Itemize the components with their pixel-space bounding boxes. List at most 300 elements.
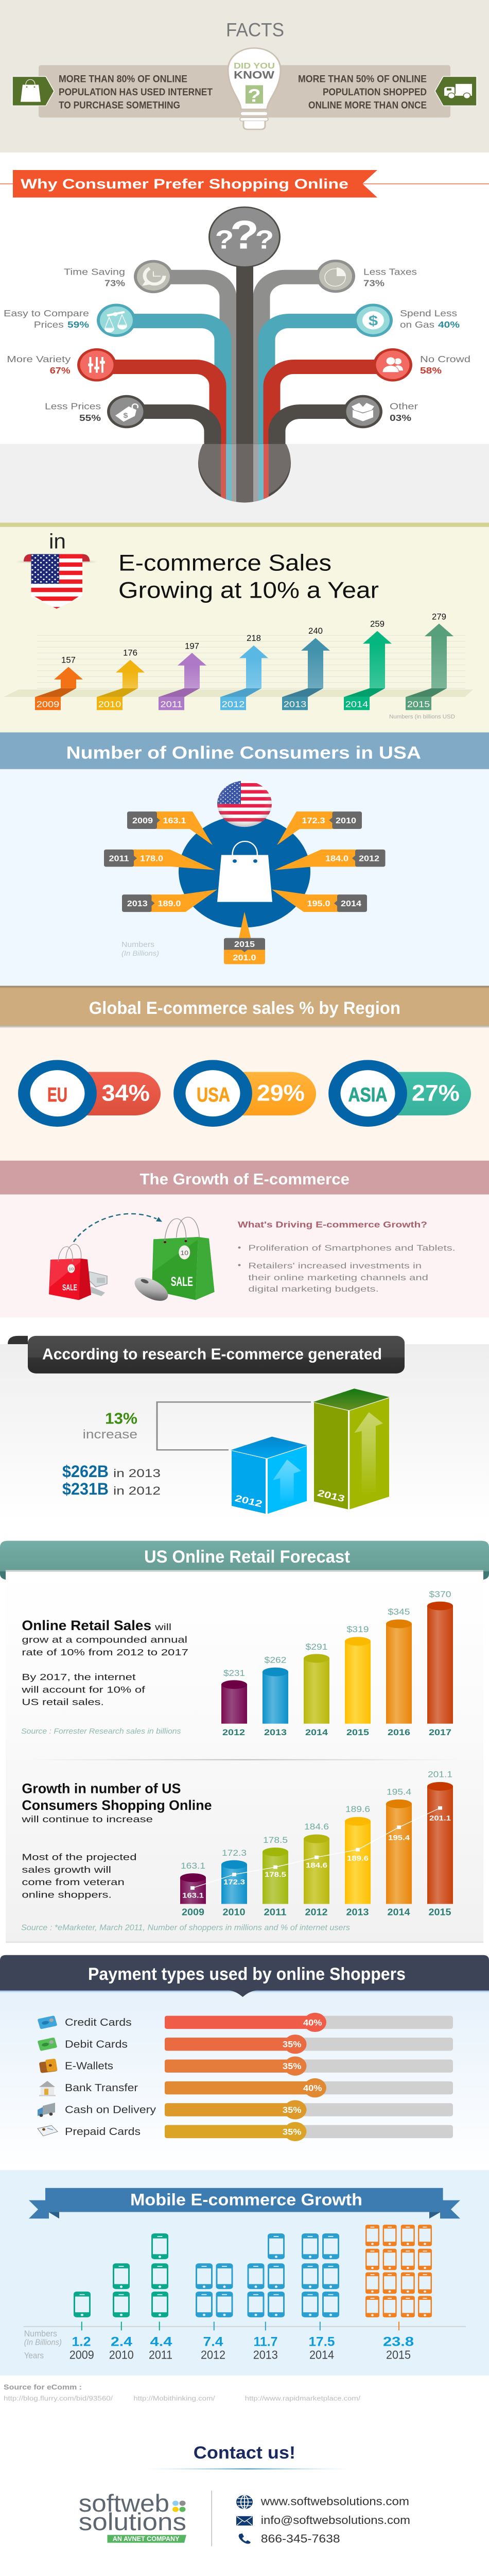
icon: delivery truck tag <box>435 76 477 106</box>
value labels above bars: 172.3 <box>222 1848 247 1858</box>
text: 80 percent fact: TO PURCHASE SOMETHING <box>59 99 180 111</box>
blue circle <box>179 816 310 927</box>
logo: softweb solutions: AN AVNET COMPANY <box>113 2535 180 2543</box>
icon: debit card <box>38 2037 57 2051</box>
values in billions <box>72 2334 414 2349</box>
panel: US online retail forecast <box>0 1541 489 1943</box>
arrow 2014: 2014 <box>345 699 368 709</box>
label: easy to compare <box>4 309 89 330</box>
label: spend less on gas: 40% <box>438 320 460 330</box>
value labels: $345 <box>388 1606 410 1617</box>
text: revenue figures: in 2012 <box>113 1485 161 1497</box>
value labels above bars: 195.4 <box>387 1787 411 1797</box>
text: 50 percent fact: POPULATION SHOPPED <box>323 87 427 97</box>
title: e-commerce sales growing: E-commerce Sales <box>118 550 331 576</box>
bar chart: online retail sales <box>221 1589 453 1737</box>
callout 2011 <box>104 850 215 870</box>
callout 2012: 184.0 <box>325 854 348 863</box>
value labels inside bars: 189.6 <box>347 1855 369 1862</box>
callout 2010 <box>277 811 362 845</box>
text: online retail sales <box>21 1618 188 1707</box>
bar chart: consumers shopping online <box>180 1769 453 1918</box>
question marks circle <box>209 207 280 267</box>
panel: did you know facts <box>0 0 489 152</box>
row: bank transfer: Bank Transfer <box>65 2082 138 2094</box>
text: 50 percent fact: ONLINE MORE THAN ONCE <box>308 99 427 111</box>
values in billions: 17.5 <box>309 2334 335 2349</box>
text: online retail sales: By 2017, the internet <box>22 1672 136 1683</box>
region: USA: USA <box>197 1083 230 1106</box>
callout 2010: 172.3 <box>302 816 325 825</box>
bar 2009 <box>180 1873 206 1904</box>
year labels: 2010 <box>222 1907 245 1918</box>
label: less prices: Less Prices <box>45 401 101 412</box>
callout 2012 <box>274 850 385 870</box>
phones: 2009 <box>74 2292 91 2317</box>
text: online retail sales: US retail sales. <box>22 1697 104 1707</box>
arrow 2011 <box>159 641 206 710</box>
values in billions: 23.8 <box>383 2334 414 2349</box>
value labels above bars <box>181 1769 452 1870</box>
text: revenue figures: $231B <box>62 1480 109 1498</box>
year labels: 2016 <box>388 1727 410 1737</box>
phones: 2012 <box>196 2263 233 2317</box>
value labels: $370 <box>429 1589 451 1599</box>
values in billions: 7.4 <box>203 2334 223 2349</box>
icon: 2012 cube: 2012 <box>234 1493 264 1510</box>
icon: computer mouse <box>130 1273 173 1306</box>
bar 2015 <box>345 1637 371 1724</box>
callout 2015: 201.0 <box>233 953 256 962</box>
value labels inside bars: 163.1 <box>182 1892 204 1900</box>
value labels: $262 <box>264 1655 286 1665</box>
callout 2011: 2011 <box>109 854 129 863</box>
question marks circle: ? <box>255 225 274 255</box>
heading band <box>0 986 489 1028</box>
value labels <box>223 1589 451 1677</box>
icon: red sale bag <box>49 1244 91 1300</box>
label: less taxes <box>363 267 417 289</box>
heading band <box>0 733 489 769</box>
axis captions <box>24 2329 62 2360</box>
icon: mail <box>236 2516 253 2526</box>
arrow 2015 <box>406 612 453 710</box>
text: in: in <box>49 530 66 553</box>
icon: shopping bag tag <box>12 76 54 106</box>
phones: 2015 <box>365 2225 432 2317</box>
bar 2010 <box>221 1860 247 1904</box>
year labels <box>222 1727 451 1737</box>
row: prepaid cards: 35% <box>283 2127 302 2137</box>
row: e-wallets <box>39 2057 453 2076</box>
row: prepaid cards: Prepaid Cards <box>65 2126 141 2138</box>
year labels: 2013 <box>264 1727 287 1737</box>
callout 2009: 163.1 <box>163 816 186 825</box>
heading band: Number of Online Consumers in USA <box>66 742 421 762</box>
row: credit cards: 40% <box>303 2018 322 2027</box>
icon: scales <box>97 303 136 337</box>
region: Asia: 27% <box>412 1080 460 1106</box>
row: debit cards: 35% <box>283 2039 302 2049</box>
panel: payment types <box>0 1955 489 2170</box>
contact section <box>79 2443 410 2546</box>
callout 2015 <box>224 912 265 964</box>
icon: globe <box>237 2496 252 2509</box>
value labels: $319 <box>347 1624 369 1634</box>
icon: red sale bag: SALE <box>62 1282 77 1292</box>
icon: open box <box>343 395 382 428</box>
text: 80 percent fact: POPULATION HAS USED INTERNET <box>59 87 213 97</box>
icon: 2012 cube <box>231 1437 307 1514</box>
callout 2014 <box>272 889 367 912</box>
icon: USA flag banner <box>15 554 98 609</box>
callout 2013: 2013 <box>127 899 148 908</box>
sources: http://www.rapidmarketplace.com/ <box>245 2395 360 2402</box>
year labels: 2012 <box>201 2348 225 2362</box>
timeline axis <box>24 2321 466 2330</box>
label: other: 03% <box>390 413 411 423</box>
callout 2014: 195.0 <box>307 899 330 908</box>
label: more variety: 67% <box>50 366 71 376</box>
values in billions: 2.4 <box>111 2334 132 2349</box>
icon: van <box>38 2103 55 2117</box>
text: what's driving growth: Proliferation of Smartphones and Tablets. <box>248 1243 456 1252</box>
icon: green sale bag: 10 <box>181 1249 188 1257</box>
year labels: 2009 <box>182 1907 204 1918</box>
value labels inside bars: 201.1 <box>429 1815 451 1822</box>
value labels inside bars: 184.6 <box>306 1862 327 1870</box>
text: 80 percent fact <box>59 73 213 111</box>
callout 2014: 2014 <box>341 899 362 908</box>
icon: price tag <box>107 395 146 428</box>
heading ribbon <box>0 170 489 197</box>
row: cash on delivery: 35% <box>283 2105 302 2115</box>
row: e-wallets: E-Wallets <box>65 2060 113 2072</box>
row: bank transfer <box>39 2078 453 2097</box>
label: no crowd: 58% <box>420 366 442 376</box>
icon: 2013 cube: 2013 <box>316 1488 346 1504</box>
text: growth in US consumers <box>21 1781 212 1900</box>
text: what's driving growth: their online marketing channels and <box>248 1273 428 1282</box>
text: growth in US consumers: Consumers Shopping Online <box>22 1798 212 1814</box>
value labels above bars: 184.6 <box>304 1821 329 1832</box>
icon: red sale bag: 10 <box>68 1266 74 1271</box>
callout 2013 <box>122 889 217 912</box>
icon: wallet <box>39 2059 58 2073</box>
arrow 2009: 2009 <box>37 699 59 709</box>
row: credit cards: Credit Cards <box>65 2016 132 2028</box>
bar 2015 <box>427 1782 453 1904</box>
panel: growth of e-commerce <box>0 1161 489 1317</box>
arrow 2011: 197 <box>185 641 199 651</box>
region: EU: EU <box>47 1083 67 1106</box>
text: what's driving growth: Retailers' increased investments in <box>248 1261 422 1270</box>
text: growth in US consumers: come from veteran <box>22 1877 125 1888</box>
arrow 2009 <box>35 655 83 710</box>
callout 2012: 2012 <box>359 854 379 863</box>
axis captions: (In Billions) <box>24 2337 62 2347</box>
label: less prices <box>45 401 101 423</box>
region: EU: 34% <box>102 1080 150 1106</box>
bar 2013 <box>263 1668 288 1724</box>
callout 2015: 2015 <box>234 940 255 949</box>
note: numbers in billions <box>121 941 159 958</box>
text: growth in US consumers: online shoppers. <box>22 1890 112 1900</box>
bar 2012 <box>304 1835 329 1904</box>
value labels: $231 <box>223 1668 245 1677</box>
heading: contact us: Contact us! <box>194 2443 295 2462</box>
arrow 2011: 2011 <box>161 699 182 709</box>
callout 2013: 189.0 <box>158 899 181 908</box>
value labels above bars: 201.1 <box>428 1769 452 1779</box>
text: 13 percent increase <box>83 1410 137 1442</box>
sources: Source for eComm : <box>4 2384 82 2391</box>
label: less taxes: 73% <box>363 278 385 289</box>
panel: e-commerce sales growth <box>0 522 489 733</box>
icon: cart <box>89 1272 107 1296</box>
heading band: The Growth of E-commerce <box>140 1171 350 1188</box>
year labels: 2017 <box>429 1727 451 1737</box>
label: no crowd <box>420 354 470 376</box>
value labels above bars: 163.1 <box>181 1860 205 1870</box>
note: numbers in billions: Numbers <box>121 941 154 949</box>
facts banner <box>39 65 450 117</box>
arrow 2010 <box>97 648 145 710</box>
note: numbers in billions: (In Billions) <box>121 950 159 958</box>
label: less taxes: Less Taxes <box>363 267 417 277</box>
arrow 2015: 279 <box>432 612 446 621</box>
callout 2009: 2009 <box>132 816 153 825</box>
icon: dollar: $ <box>369 313 378 329</box>
icon: people <box>373 348 412 381</box>
icon: ID card <box>38 2126 58 2136</box>
heading: FACTS: FACTS <box>226 19 284 41</box>
label: spend less on gas: on Gas <box>400 320 434 330</box>
row: debit cards <box>38 2035 453 2054</box>
text: online retail sales: Online Retail Sales <box>22 1618 151 1634</box>
arrow: dashed growth arrow <box>74 1214 162 1242</box>
heading ribbon: Mobile E-commerce Growth <box>130 2191 362 2209</box>
icon: price tag: $ <box>124 412 128 420</box>
chart: arrows by year <box>4 612 473 710</box>
year labels: 2010 <box>109 2348 134 2362</box>
heading band <box>0 1161 489 1194</box>
sources: http://Mobithinking.com/ <box>133 2395 215 2402</box>
text: 50 percent fact <box>298 73 427 111</box>
year labels: 2015 <box>428 1907 451 1918</box>
text: website: www.softwebsolutions.com <box>260 2495 409 2508</box>
region: Asia: ASIA <box>348 1083 388 1106</box>
icon: phone <box>239 2533 251 2544</box>
text: online retail sales: rate of 10% from 2012 to 2017 <box>22 1647 188 1657</box>
logo: softweb solutions <box>79 2490 186 2543</box>
bar 2011 <box>263 1848 288 1904</box>
heading ribbon <box>8 1336 405 1374</box>
label: no crowd: No Crowd <box>420 354 470 365</box>
heading band: Payment types used by online Shoppers <box>88 1964 406 1984</box>
icon: time saving <box>134 260 173 293</box>
axis captions: Years <box>24 2350 44 2360</box>
callout 2010: 2010 <box>336 816 356 825</box>
text: email: info@softwebsolutions.com <box>261 2514 410 2527</box>
text: online retail sales: will <box>154 1622 171 1633</box>
arrow 2012: 2012 <box>222 699 244 709</box>
region: USA <box>173 1060 316 1127</box>
icon: green sale bag: SALE <box>171 1274 193 1289</box>
icon: did you know light bulb <box>228 48 281 129</box>
icon: did you know light bulb: KNOW <box>234 69 274 81</box>
value labels inside bars: 195.4 <box>388 1835 410 1842</box>
phones: 2013 <box>247 2233 285 2317</box>
year labels: 2012 <box>222 1727 245 1737</box>
icon: green sale bag <box>152 1217 215 1300</box>
callout 2009 <box>127 811 213 845</box>
year labels: 2012 <box>305 1907 328 1918</box>
text: revenue figures: in 2013 <box>113 1467 161 1480</box>
arrow 2012 <box>220 633 268 710</box>
year labels: 2015 <box>386 2348 411 2362</box>
text: what's driving growth: digital marketing budgets. <box>248 1284 379 1294</box>
source note: eMarketer: Source : *eMarketer, March 2011, Number of shoppers in millions and % of internet users <box>21 1923 350 1932</box>
label: less prices: 55% <box>79 413 101 423</box>
tree branches <box>97 277 393 446</box>
heading band: US Online Retail Forecast <box>144 1547 350 1566</box>
bar 2014 <box>304 1654 329 1724</box>
icon: did you know light bulb: ? <box>248 86 261 106</box>
arrow 2009: 157 <box>61 655 76 665</box>
text: growth in US consumers: sales growth will <box>22 1865 111 1875</box>
year labels: 2011 <box>149 2348 172 2362</box>
heading ribbon: Why Consumer Prefer Shopping Online <box>21 176 348 192</box>
text: phone number: 866-345-7638 <box>261 2533 340 2546</box>
row: credit cards <box>38 2013 453 2032</box>
year labels <box>182 1907 451 1918</box>
arrow 2010: 2010 <box>98 699 121 709</box>
text: 80 percent fact: MORE THAN 80% OF ONLINE <box>59 73 187 84</box>
label: time saving <box>64 267 125 289</box>
label: spend less on gas: Spend Less <box>400 309 457 319</box>
label: other <box>390 401 418 423</box>
value labels inside bars: 172.3 <box>223 1878 245 1886</box>
arrow 2015: 2015 <box>407 699 430 709</box>
year labels: 2014 <box>309 2348 334 2362</box>
icon: variety sliders <box>77 348 116 381</box>
heading ribbon <box>29 2188 460 2218</box>
row: e-wallets: 35% <box>283 2061 302 2071</box>
bracket line <box>157 1402 311 1450</box>
text: 13 percent increase: 13% <box>105 1410 137 1428</box>
axis captions: Numbers <box>24 2329 57 2338</box>
year labels: 2011 <box>264 1907 287 1918</box>
source note: forrester: Source : Forrester Research sales in billions <box>21 1727 181 1736</box>
question marks circle: ? <box>230 213 259 258</box>
bar 2014 <box>386 1800 412 1904</box>
row: cash on delivery: Cash on Delivery <box>65 2104 156 2115</box>
text: growth in US consumers: Most of the projected <box>22 1852 136 1862</box>
icon: flag ball <box>216 779 273 828</box>
panel: mobile e-commerce growth <box>0 2170 489 2376</box>
text: what's driving growth: What's Driving E-commerce Growth? <box>238 1219 427 1229</box>
label: easy to compare: Prices <box>34 320 64 330</box>
label: more variety <box>7 354 71 376</box>
heading band <box>0 1955 489 1997</box>
panel: global sales by region <box>0 986 489 1161</box>
text: online retail sales: will account for 10% of <box>21 1685 146 1695</box>
phones: 2011 <box>151 2233 168 2317</box>
value labels above bars: 178.5 <box>263 1835 288 1844</box>
icon: bank <box>39 2081 56 2096</box>
tree base <box>198 444 291 503</box>
title: e-commerce sales growing <box>118 550 379 603</box>
values in billions: 4.4 <box>150 2334 172 2349</box>
value labels above bars: 189.6 <box>345 1804 370 1814</box>
panel: why consumers prefer online shopping <box>0 170 489 522</box>
icon: credit card <box>38 2015 57 2029</box>
note: numbers in billions: Numbers (in billions USD <box>389 713 455 720</box>
icon: pie chart <box>316 260 355 293</box>
arrow 2014 <box>344 619 392 710</box>
values in billions: 1.2 <box>72 2334 91 2349</box>
text: online retail sales: grow at a compounded annual <box>22 1635 187 1645</box>
heading band <box>0 1541 489 1580</box>
row: cash on delivery <box>38 2100 453 2120</box>
icon: shopping bag <box>217 841 272 902</box>
arrow 2013 <box>282 625 330 710</box>
bar 2016 <box>386 1619 412 1724</box>
title: e-commerce sales growing: Growing at 10% a Year <box>118 578 379 603</box>
icon: 2013 cube <box>313 1388 390 1510</box>
text: what's driving growth <box>238 1219 456 1294</box>
phones: 2014 <box>302 2233 339 2317</box>
tree trunk <box>236 262 253 446</box>
region: Asia <box>328 1060 471 1127</box>
arrow 2012: 218 <box>247 633 261 643</box>
question marks circle: ? <box>215 225 234 255</box>
text: 13 percent increase: increase <box>83 1427 137 1442</box>
label: easy to compare: Easy to Compare <box>4 309 89 319</box>
text: revenue figures <box>62 1462 161 1498</box>
icon: dollar <box>354 303 393 337</box>
panel: research generated <box>0 1336 489 1541</box>
values in billions: 11.7 <box>253 2334 277 2349</box>
region: EU <box>18 1060 161 1127</box>
value labels: $291 <box>306 1641 327 1652</box>
trend line with markers <box>190 1806 442 1890</box>
year labels: 2015 <box>346 1727 369 1737</box>
label: other: Other <box>390 401 418 412</box>
text: growth in US consumers: Growth in number of US <box>22 1781 181 1797</box>
panel: online consumers in USA <box>0 733 489 986</box>
label: spend less on gas <box>400 309 460 330</box>
bar 2013 <box>345 1817 371 1904</box>
callout 2011: 178.0 <box>140 854 163 863</box>
text: growth in US consumers: will continue to increase <box>21 1815 153 1825</box>
arrow 2013: 240 <box>308 625 323 636</box>
arrow 2014: 259 <box>370 619 385 629</box>
year labels: 2014 <box>387 1907 410 1918</box>
logo: softweb solutions: softweb <box>79 2490 169 2517</box>
label: easy to compare: 59% <box>67 320 89 330</box>
year labels <box>69 2348 411 2362</box>
logo: softweb solutions: solutions <box>79 2509 186 2536</box>
arrow 2013: 2013 <box>284 699 306 709</box>
year labels: 2014 <box>305 1727 328 1737</box>
sources <box>4 2384 360 2402</box>
icon: did you know light bulb: DID YOU <box>234 61 275 71</box>
label: time saving: 73% <box>104 278 125 289</box>
label: more variety: More Variety <box>7 354 71 365</box>
text: 50 percent fact: MORE THAN 50% OF ONLINE <box>298 73 427 84</box>
